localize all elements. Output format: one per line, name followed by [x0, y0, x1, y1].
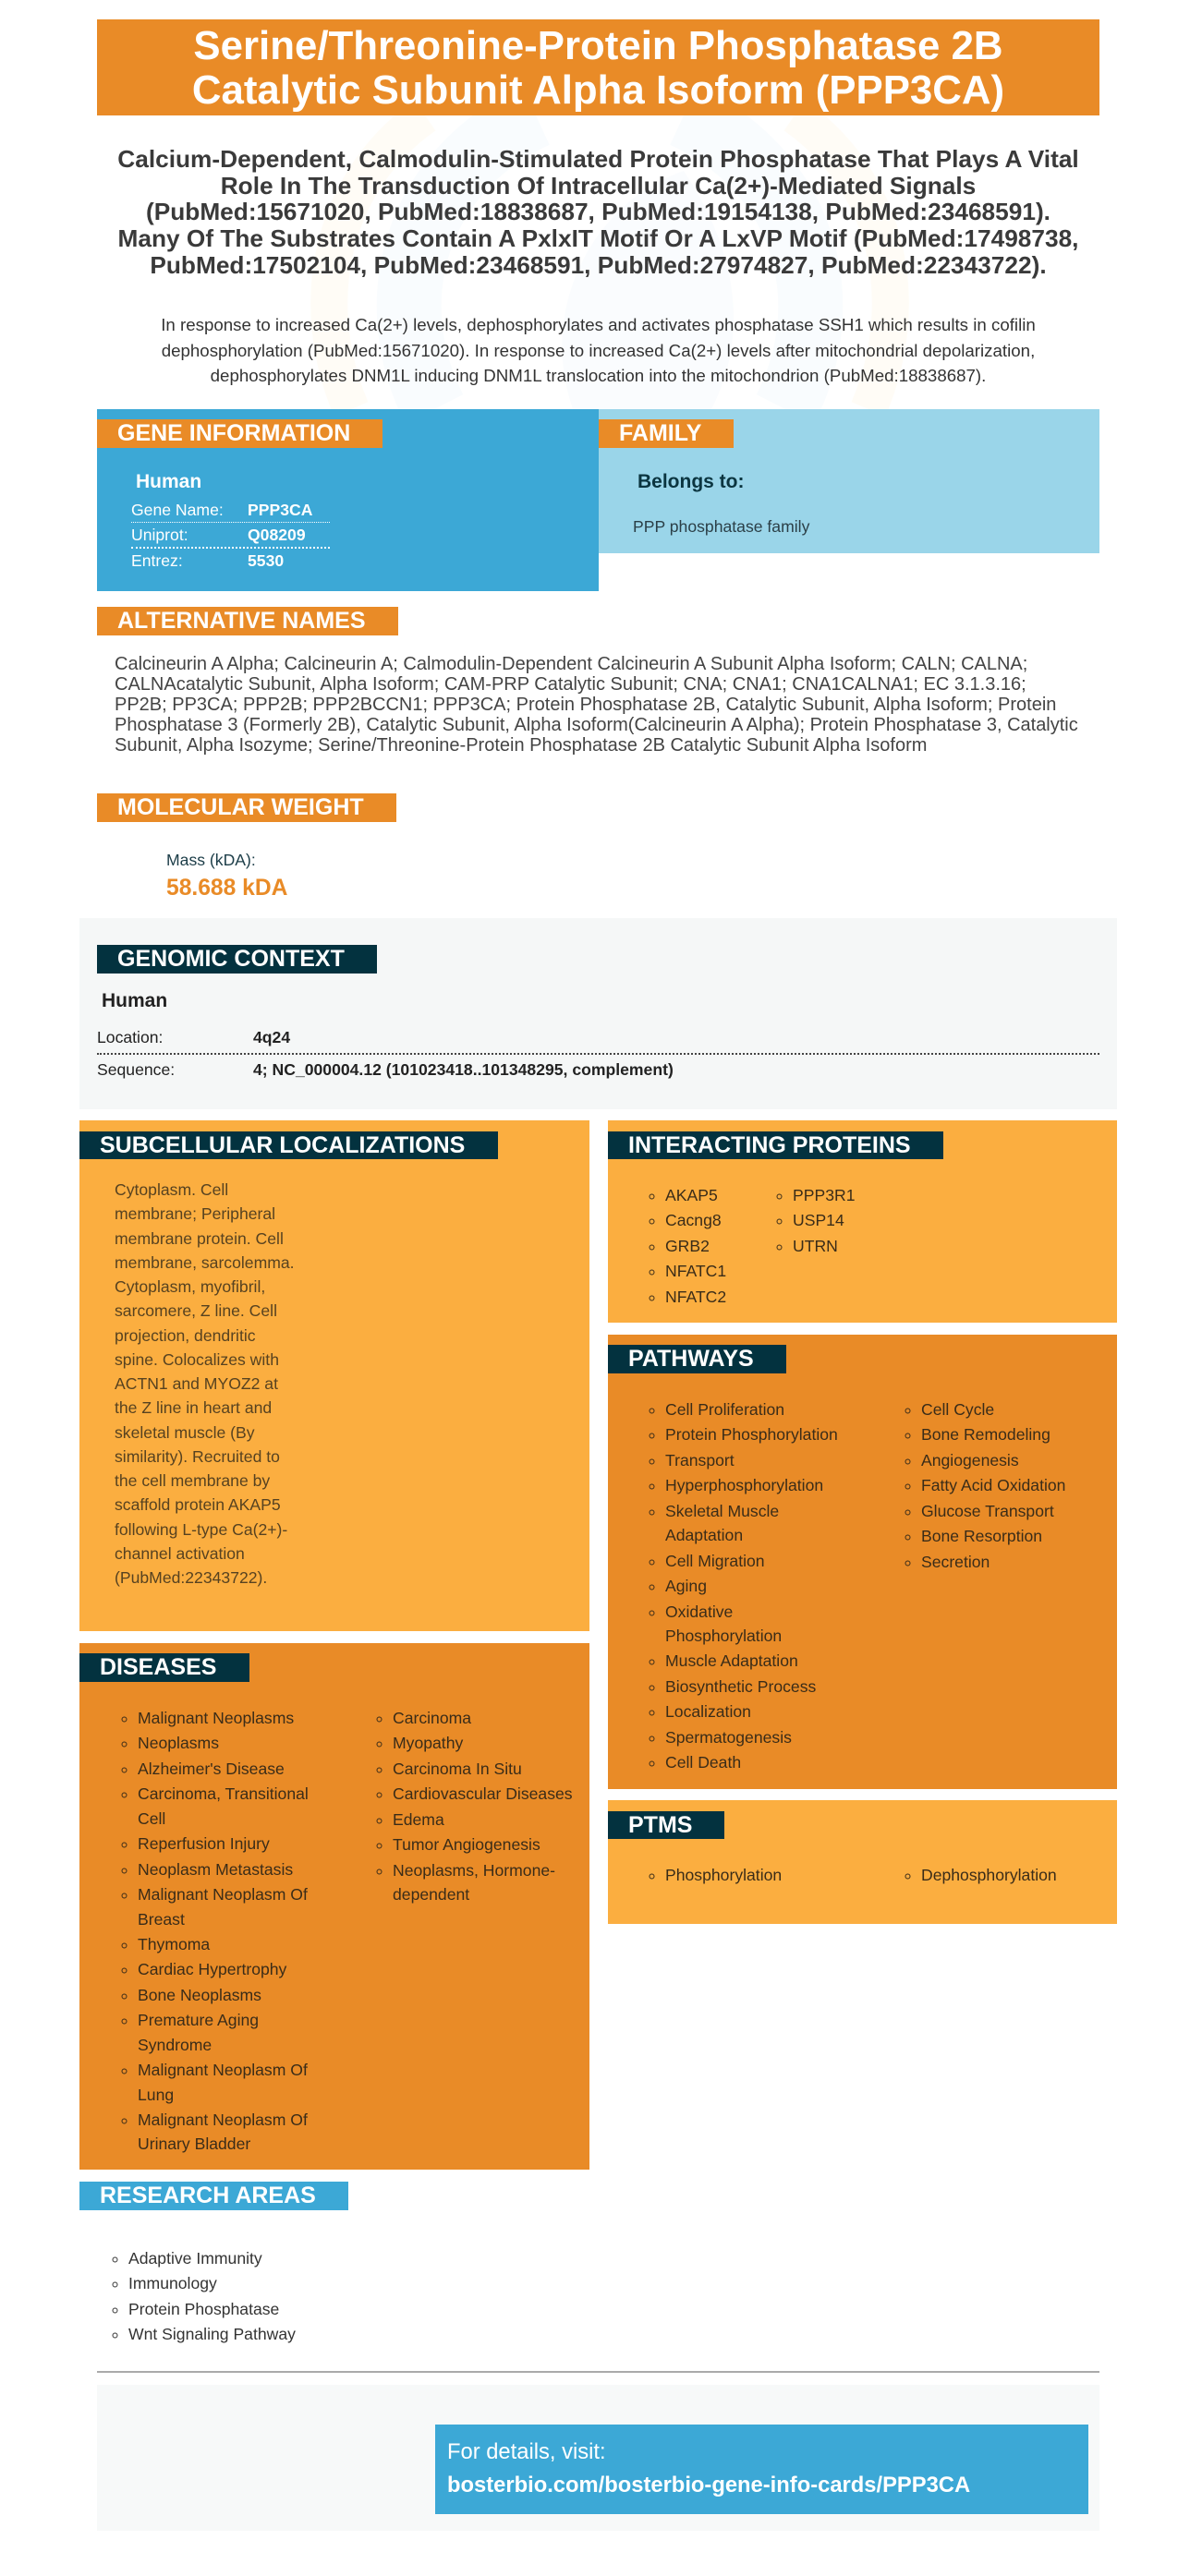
belongs to label: Belongs to: — [638, 471, 745, 492]
alternative names text: PP2B; PP3CA; PPP2B; PPP2BCCN1; PPP3CA; Protein Phosphatase 2B, Catalytic Subunit, Alpha Isoform; Protein — [115, 695, 1056, 715]
disease list column 1: Neoplasms — [138, 1734, 219, 1752]
protein list column 1: Cacng8 — [665, 1211, 722, 1229]
sequence row: 4; NC_000004.12 (101023418..101348295, complement) — [253, 1060, 674, 1079]
disease list column 1: Lung — [138, 2086, 174, 2104]
heading: subcellular localizations: SUBCELLULAR LOCALIZATIONS — [100, 1132, 465, 1158]
pathway list column 1: Localization — [665, 1702, 751, 1721]
panel: subcellular localizations — [79, 1120, 589, 1631]
pathway list column 2: Secretion — [921, 1553, 990, 1571]
alternative names text: Calcineurin A Alpha; Calcineurin A; Calmodulin-Dependent Calcineurin A Subunit Alpha Isoform; CALN; CALNA; — [115, 654, 1027, 674]
gene name row — [131, 501, 330, 523]
disease list column 1: Malignant Neoplasm Of — [138, 2061, 308, 2079]
pathway list column 2: Fatty Acid Oxidation — [921, 1476, 1065, 1494]
alternative names text: CALNAcatalytic Subunit, Alpha Isoform; CAM-PRP Catalytic Subunit; CNA; CNA1; CNA1CALNA1; EC 3.1.3.16; — [115, 674, 1026, 695]
disease list column 2: Carcinoma In Situ — [393, 1760, 522, 1778]
pathway list column 1: Cell Death — [665, 1753, 741, 1772]
pathway list column 1: Hyperphosphorylation — [665, 1476, 823, 1494]
protein list column 1: NFATC1 — [665, 1262, 726, 1280]
pathway list column 1: Phosphorylation — [665, 1627, 782, 1645]
entrez row: 5530 — [248, 551, 284, 570]
heading: genomic context: GENOMIC CONTEXT — [117, 946, 345, 972]
heading: diseases: DISEASES — [100, 1654, 216, 1680]
localization text: sarcomere, Z line. Cell — [115, 1301, 277, 1320]
uniprot row — [131, 526, 330, 549]
pathway list column 1: Cell Proliferation — [665, 1400, 784, 1419]
alternative names text: Subunit, Alpha Isozyme; Serine/Threonine-Protein Phosphatase 2B Catalytic Subunit Alpha Isoform — [115, 735, 927, 756]
disease list column 1: Urinary Bladder — [138, 2135, 250, 2153]
disease list column 1: Premature Aging — [138, 2011, 259, 2029]
pathway list column 1: Transport — [665, 1451, 735, 1469]
disease list column 2: Neoplasms, Hormone- — [393, 1861, 555, 1880]
entrez row — [131, 551, 284, 570]
location row — [97, 1028, 1099, 1055]
protein list column 2: UTRN — [793, 1237, 838, 1255]
protein list column 1: NFATC2 — [665, 1288, 726, 1306]
localization text: skeletal muscle (By — [115, 1422, 255, 1441]
disease list column 1: Alzheimer's Disease — [138, 1760, 285, 1778]
panel: family — [599, 409, 1099, 553]
disease list column 1: Malignant Neoplasm Of — [138, 2110, 308, 2129]
heading: ptms: PTMS — [628, 1812, 692, 1838]
pathway list column 2: Bone Remodeling — [921, 1425, 1050, 1444]
heading: ptms — [608, 1811, 724, 1839]
sequence row: Sequence: — [97, 1060, 175, 1079]
description paragraph: dephosphorylation (PubMed:15671020). In response to increased Ca(2+) levels after mitochondrial depolarization, — [162, 341, 1035, 360]
subtitle: Role In The Transduction Of Intracellular Ca(2+)-Mediated Signals — [221, 172, 976, 200]
disease list column 2: dependent — [393, 1885, 469, 1904]
research areas list: Protein Phosphatase — [128, 2300, 279, 2318]
ptm list column 2: Dephosphorylation — [921, 1866, 1057, 1884]
description paragraph — [161, 315, 1036, 385]
protein list column 2: PPP3R1 — [793, 1186, 855, 1204]
pathway list column 2: Bone Resorption — [921, 1527, 1042, 1545]
protein list column 1: GRB2 — [665, 1237, 710, 1255]
subtitle: (PubMed:15671020, PubMed:18838687, PubMed:19154138, PubMed:23468591). — [146, 198, 1050, 225]
research areas list: Wnt Signaling Pathway — [128, 2325, 296, 2343]
uniprot row: Uniprot: — [131, 526, 188, 544]
heading: pathways — [608, 1345, 786, 1373]
localization text: spine. Colocalizes with — [115, 1350, 279, 1369]
pathway list column 2: Glucose Transport — [921, 1502, 1054, 1520]
disease list column 2: Cardiovascular Diseases — [393, 1784, 573, 1803]
mass value: 58.688 kDA — [166, 876, 287, 901]
heading: family — [599, 419, 734, 448]
title — [97, 19, 1099, 115]
disease list column 1: Thymoma — [138, 1935, 210, 1953]
subtitle: Calcium-Dependent, Calmodulin-Stimulated Protein Phosphatase That Plays A Vital — [117, 145, 1079, 173]
alternative names text: Phosphatase 3 (Formerly 2B), Catalytic Subunit, Alpha Isoform(Calcineurin A Alpha); Protein Phosphatase 3, Catalytic — [115, 715, 1078, 735]
research areas list: Adaptive Immunity — [128, 2249, 262, 2268]
disease list column 1: Malignant Neoplasm Of — [138, 1885, 308, 1904]
pathway list column 1: Protein Phosphorylation — [665, 1425, 838, 1444]
localization text: membrane, sarcolemma. — [115, 1253, 295, 1272]
disease list column 1: Cell — [138, 1809, 165, 1828]
title: Serine/Threonine-Protein Phosphatase 2B — [193, 23, 1003, 68]
localization text: the cell membrane by — [115, 1471, 270, 1490]
subtitle — [117, 145, 1079, 279]
alternative names text — [115, 654, 1078, 756]
protein list column 2: USP14 — [793, 1211, 844, 1229]
subtitle: Many Of The Substrates Contain A PxlxIT Motif Or A LxVP Motif (PubMed:17498738, — [118, 224, 1078, 252]
localization text — [115, 1180, 295, 1587]
title: Catalytic Subunit Alpha Isoform (PPP3CA) — [192, 67, 1004, 113]
localization text: (PubMed:22343722). — [115, 1568, 267, 1587]
disease list column 1: Syndrome — [138, 2036, 212, 2054]
uniprot row: Q08209 — [248, 526, 306, 544]
disease list column 1: Neoplasm Metastasis — [138, 1860, 293, 1879]
pathway list column 1 — [649, 1400, 838, 1772]
pathway list column 1: Aging — [665, 1577, 707, 1595]
mass label: Mass (kDA): — [166, 851, 256, 869]
species label: Human — [136, 471, 201, 492]
pathway list column 1: Muscle Adaptation — [665, 1651, 798, 1670]
pathway list column 1: Spermatogenesis — [665, 1728, 792, 1747]
heading: gene information: GENE INFORMATION — [117, 420, 350, 446]
localization text: ACTN1 and MYOZ2 at — [115, 1374, 278, 1393]
pathway list column 1: Skeletal Muscle — [665, 1502, 779, 1520]
details label: For details, visit: — [447, 2439, 606, 2464]
details url: bosterbio.com/bosterbio-gene-info-cards/PPP3CA — [447, 2473, 970, 2497]
heading: interacting proteins: INTERACTING PROTEINS — [628, 1132, 911, 1158]
disease list column 1: Reperfusion Injury — [138, 1834, 270, 1853]
pathway list column 1: Adaptation — [665, 1526, 743, 1544]
location row: Location: — [97, 1028, 163, 1046]
panel: ptms — [608, 1800, 1117, 1924]
heading: pathways: PATHWAYS — [628, 1346, 754, 1372]
panel: footer — [97, 2385, 1099, 2531]
pathway list column 2: Angiogenesis — [921, 1451, 1019, 1469]
location row: 4q24 — [253, 1028, 290, 1046]
details callout — [435, 2425, 1088, 2514]
gene name row: Gene Name: — [131, 501, 224, 519]
disease list column 1: Bone Neoplasms — [138, 1986, 261, 2004]
subtitle: PubMed:17502104, PubMed:23468591, PubMed:27974827, PubMed:22343722). — [150, 251, 1047, 279]
pathway list column 2: Cell Cycle — [921, 1400, 994, 1419]
panel: interacting proteins — [608, 1120, 1117, 1323]
localization text: scaffold protein AKAP5 — [115, 1495, 281, 1514]
family value: PPP phosphatase family — [633, 517, 809, 536]
pathway list column 1: Cell Migration — [665, 1552, 765, 1570]
disease list column 1: Breast — [138, 1910, 185, 1929]
localization text: membrane; Peripheral — [115, 1204, 275, 1223]
description paragraph: In response to increased Ca(2+) levels, dephosphorylates and activates phosphatase SSH1 which results in cofilin — [161, 315, 1036, 334]
protein list column 1 — [649, 1186, 726, 1306]
disease list column 2: Myopathy — [393, 1734, 463, 1752]
heading: diseases — [79, 1653, 249, 1682]
localization text: the Z line in heart and — [115, 1398, 272, 1417]
disease list column 2: Carcinoma — [393, 1709, 471, 1727]
disease list column 1: Carcinoma, Transitional — [138, 1784, 309, 1803]
pathway list column 2 — [905, 1400, 1065, 1571]
ptm list column 1: Phosphorylation — [665, 1866, 782, 1884]
pathway list column 1: Oxidative — [665, 1602, 733, 1621]
panel: diseases — [79, 1643, 589, 2170]
protein list column 1: AKAP5 — [665, 1186, 718, 1204]
research areas list: Immunology — [128, 2274, 217, 2292]
description paragraph: dephosphorylates DNM1L inducing DNM1L translocation into the mitochondrion (PubMed:18838687). — [211, 366, 986, 385]
disease list column 2 — [377, 1709, 573, 1904]
protein list column 2 — [776, 1186, 855, 1255]
heading: molecular weight: MOLECULAR WEIGHT — [117, 794, 364, 820]
disease list column 1: Cardiac Hypertrophy — [138, 1960, 286, 1978]
disease list column 1: Malignant Neoplasms — [138, 1709, 294, 1727]
gene name row: PPP3CA — [248, 501, 312, 519]
panel: genomic context — [79, 918, 1117, 1109]
watermark logo — [310, 115, 909, 409]
entrez row: Entrez: — [131, 551, 183, 570]
panel: pathways — [608, 1335, 1117, 1789]
localization text: projection, dendritic — [115, 1326, 256, 1345]
localization text: membrane protein. Cell — [115, 1228, 284, 1247]
localization text: channel activation — [115, 1544, 245, 1563]
panel: gene information — [97, 409, 599, 591]
disease list column 2: Tumor Angiogenesis — [393, 1835, 540, 1854]
heading: research areas: RESEARCH AREAS — [100, 2183, 316, 2208]
species label: Human — [102, 990, 167, 1011]
heading: alternative names: ALTERNATIVE NAMES — [117, 608, 366, 634]
localization text: similarity). Recruited to — [115, 1447, 280, 1466]
localization text: following L-type Ca(2+)- — [115, 1520, 287, 1539]
research areas list — [113, 2249, 296, 2343]
localization text: Cytoplasm. Cell — [115, 1180, 228, 1199]
heading: family: FAMILY — [619, 420, 701, 446]
disease list column 2: Edema — [393, 1810, 444, 1829]
disease list column 1 — [122, 1709, 309, 2153]
localization text: Cytoplasm, myofibril, — [115, 1277, 265, 1296]
pathway list column 1: Biosynthetic Process — [665, 1677, 816, 1696]
